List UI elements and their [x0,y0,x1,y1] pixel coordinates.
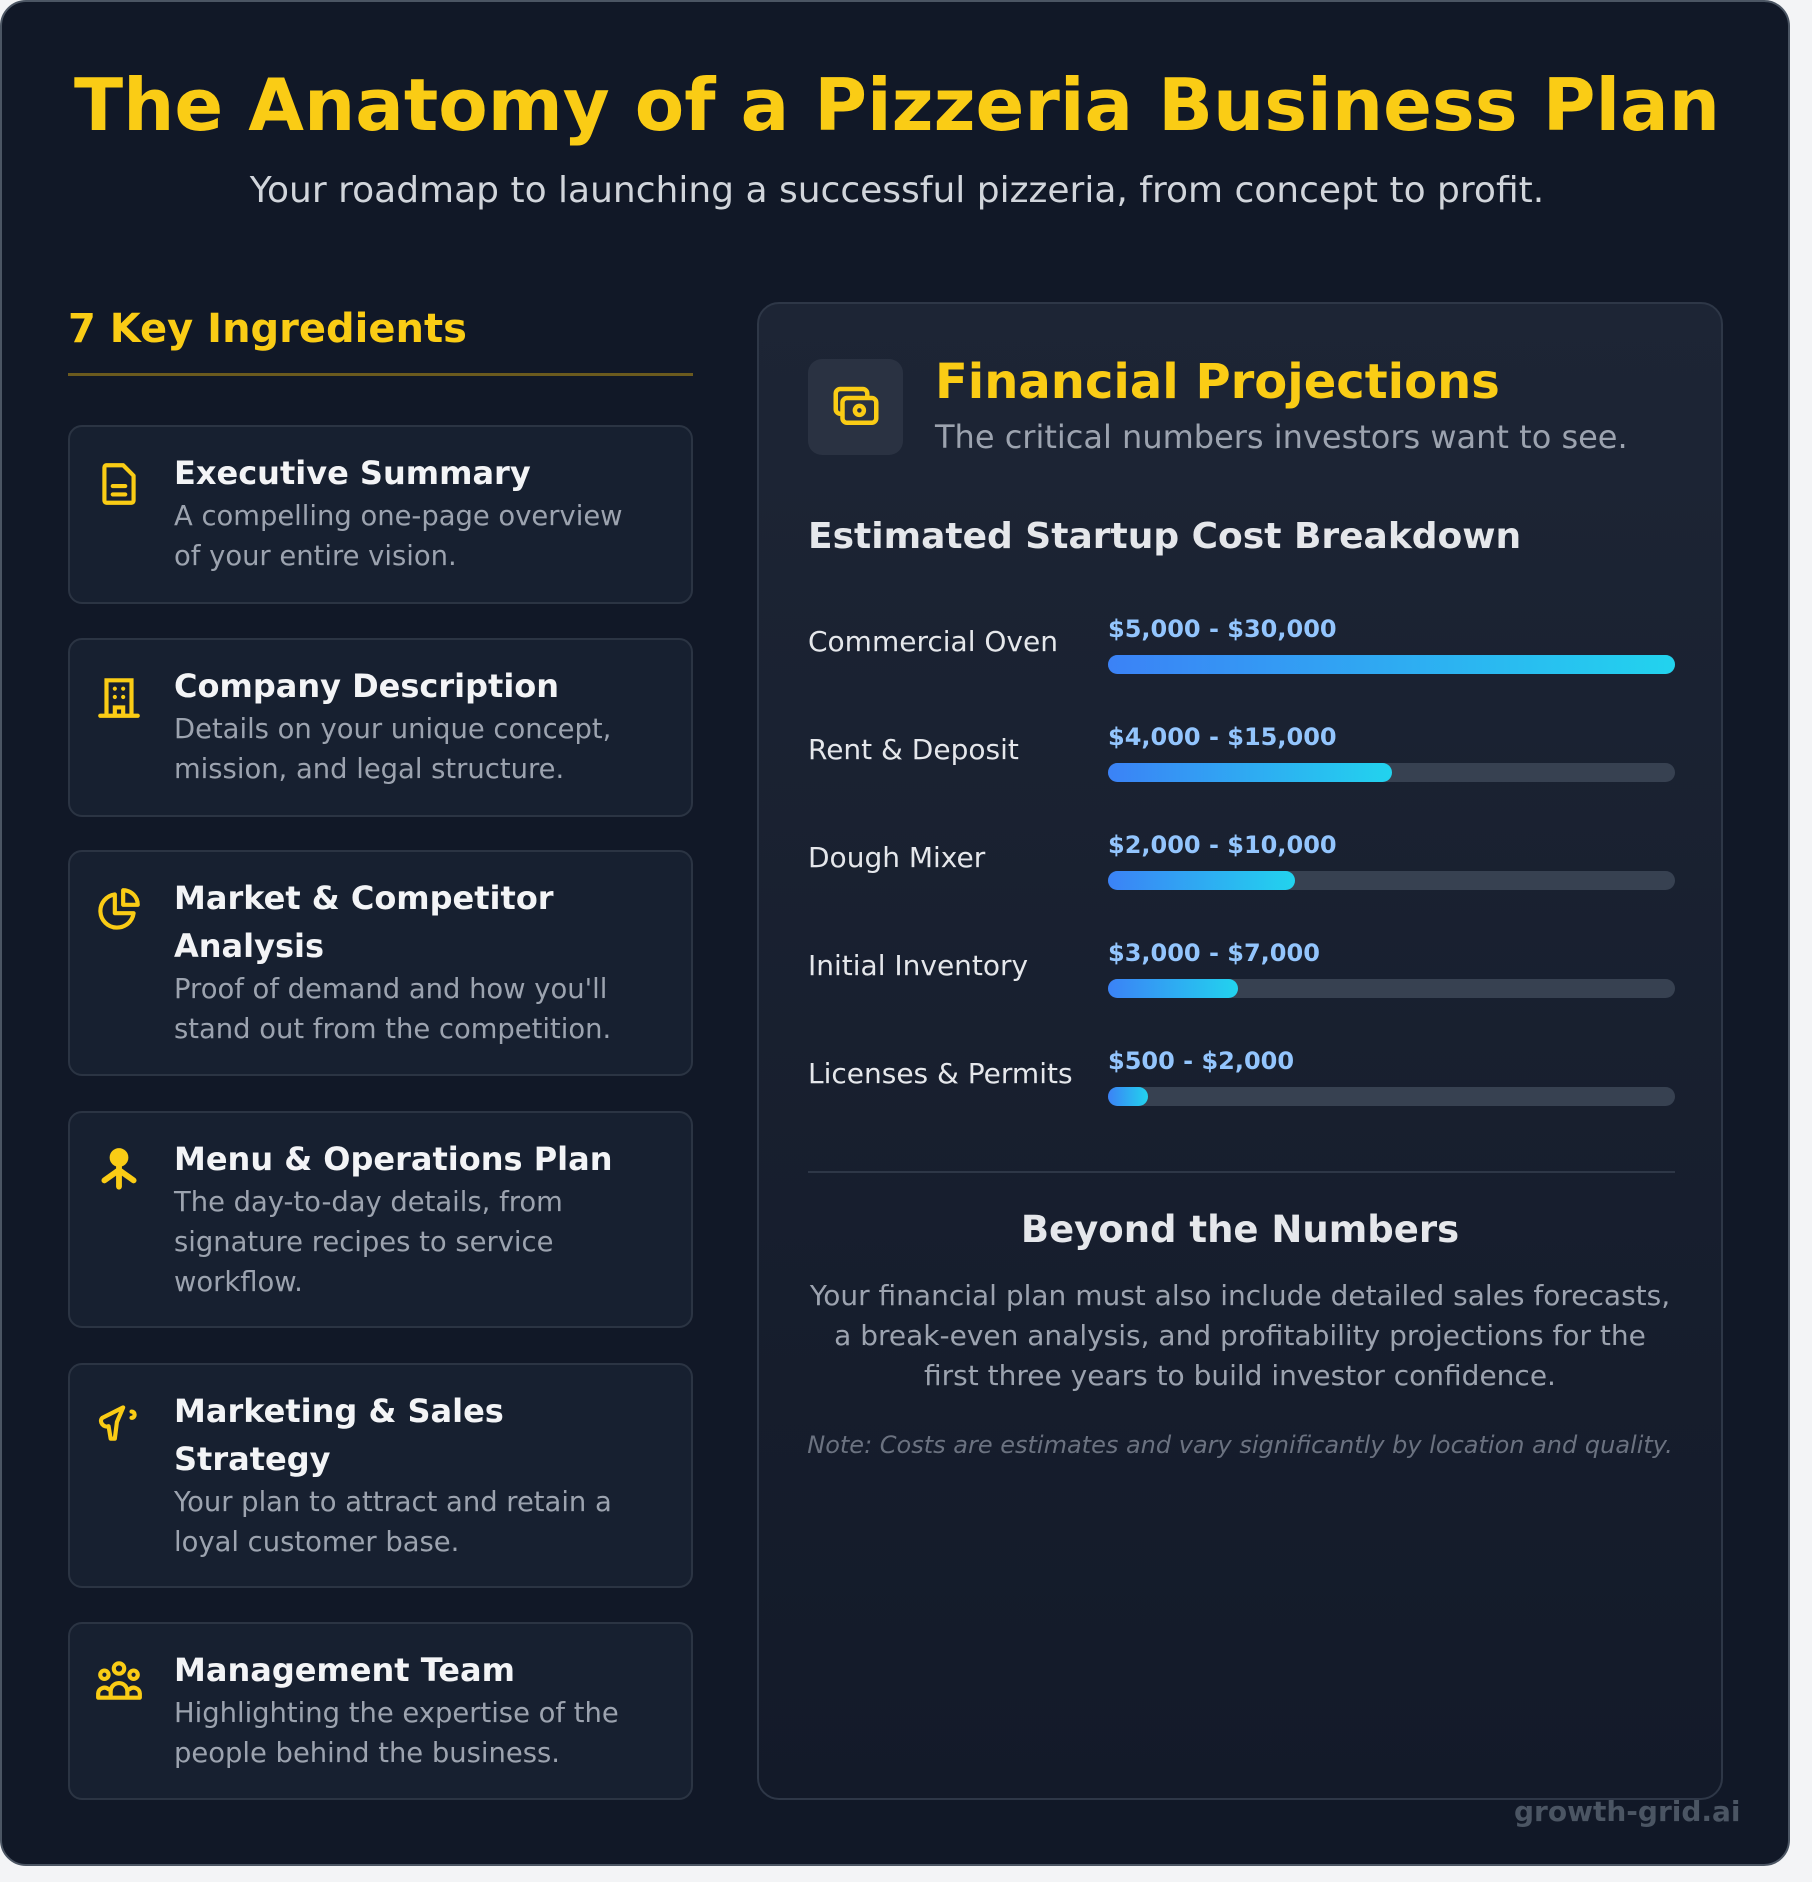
bar chart: Rent & Deposit [808,733,1019,766]
bar chart: $5,000 - $30,000 [1108,615,1337,643]
card: menu & operations: The day-to-day details, from signature recipes to service workflow. [174,1187,563,1298]
text block: Your financial plan must also include detailed sales forecasts, a break‑even analysis, and profitability projections for the first three years to build investor confidence. [810,1279,1670,1392]
card: company description [68,638,693,817]
subtitle: Your roadmap to launching a successful pizzeria, from concept to profit. [250,170,1544,211]
icon: megaphone [98,1405,137,1441]
note: Note: Costs are estimates and vary significantly by location and quality. [807,1431,1673,1459]
bar chart: $4,000 - $15,000 [1108,723,1337,751]
bar chart: $2,000 - $10,000 [1108,831,1337,859]
card: marketing [68,1363,693,1588]
card: market analysis: Proof of demand and how you'll stand out from the competition. [174,974,611,1045]
card: executive summary: Executive Summary [174,454,531,492]
card: company description: Details on your unique concept, mission, and legal structure. [174,714,611,785]
heading: 7 key ingredients: 7 Key Ingredients [68,306,467,352]
card: market analysis [68,850,693,1076]
card: executive summary [68,425,693,604]
bar chart: $500 - $2,000 [1108,1047,1294,1075]
icon: chef [102,1148,136,1190]
panel subtitle: The critical numbers investors want to see. [935,418,1628,456]
panel: financial projections [757,302,1723,1800]
card: executive summary: A compelling one-page overview of your entire vision. [174,501,623,572]
icon: money [808,359,903,455]
bar chart: Commercial Oven [808,625,1058,658]
card: management team: Management Team [174,1651,515,1689]
bar chart: Dough Mixer [808,841,985,874]
card: market analysis: Market & Competitor Analysis [174,879,554,965]
bar chart: Licenses & Permits [808,1057,1073,1090]
chart heading: Estimated Startup Cost Breakdown [808,516,1521,557]
card: marketing: Your plan to attract and retain a loyal customer base. [174,1487,612,1558]
bar chart: Initial Inventory [808,949,1028,982]
card: menu & operations [68,1111,693,1328]
icon: pie chart [98,888,140,930]
heading: beyond the numbers: Beyond the Numbers [1021,1208,1459,1251]
card: management team: Highlighting the expertise of the people behind the business. [174,1698,619,1769]
card: management team [68,1622,693,1800]
bar chart: $3,000 - $7,000 [1108,939,1320,967]
title: The Anatomy of a Pizzeria Business Plan [74,63,1720,147]
card: marketing: Marketing & Sales Strategy [174,1392,504,1478]
panel heading: Financial Projections [935,354,1500,410]
icon: building [98,678,140,718]
icon: team [96,1661,142,1700]
card: company description: Company Description [174,667,559,705]
watermark: growth-grid.ai [1514,1795,1741,1828]
card: menu & operations: Menu & Operations Plan [174,1140,612,1178]
bar chart [808,615,1675,1106]
icon: document [102,463,136,505]
